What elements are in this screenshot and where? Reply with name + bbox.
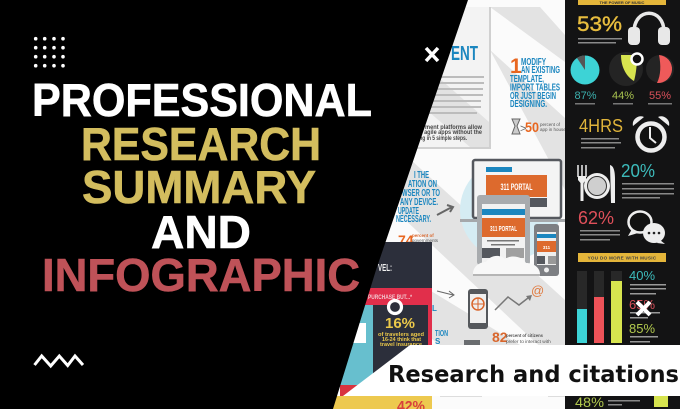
- stat: 74 percent: governments: [412, 238, 439, 243]
- bar chart: [577, 271, 622, 343]
- icon: ring: [388, 300, 402, 314]
- blue heading fragments: TION: [435, 329, 448, 338]
- arrow toward phone: [437, 291, 454, 298]
- step 1 heading: IMPORT TABLES: [510, 82, 560, 94]
- dark panel: travel infographic: travel insurance: [380, 342, 422, 348]
- pie: 55%: [646, 55, 674, 104]
- banner: you do more with music: [578, 253, 666, 262]
- heading: ENT: ENT: [451, 43, 478, 65]
- bold text block: [418, 125, 483, 142]
- stat: 50 percent: percent of: [540, 122, 561, 127]
- step 1 heading: DESIGNING.: [510, 99, 547, 110]
- stat: 65%: [629, 297, 660, 318]
- icon: plate and cutlery: [578, 165, 615, 203]
- dark panel: travel infographic: of travelers aged: [378, 332, 424, 338]
- heading: update on any device: NECESSARY.: [396, 214, 431, 225]
- stat: 50 percent: app in house: [540, 127, 566, 132]
- bottom strip: infographic remnants: [333, 394, 680, 409]
- stat: 40%: [629, 268, 666, 294]
- icon: zigzag: [34, 356, 83, 366]
- stat: 85%: 85%: [629, 321, 655, 336]
- stat: 74 percent: percent of: [412, 233, 434, 238]
- stat: 20%: [621, 161, 674, 198]
- phone: 311: [543, 245, 551, 250]
- stat: 82 percent: 82: [492, 329, 508, 345]
- cloud: [473, 256, 540, 276]
- dark panel: travel infographic: 16-24 think that: [382, 337, 421, 343]
- heading: update on any device: WSER OR TO: [402, 188, 440, 199]
- icon: devices showing 311 portal: [460, 160, 570, 276]
- dark panel: travel infographic: 16%: [385, 315, 415, 332]
- pie: 55%: 55%: [649, 90, 671, 102]
- stat: 82 percent: prefer to interact with: [506, 339, 551, 345]
- step 1 heading: AN EXISTING: [521, 65, 560, 76]
- bold text block: ment platforms allow: [425, 125, 482, 131]
- title: [32, 74, 372, 301]
- banner: you do more with music: YOU DO MORE WITH MUSIC: [588, 256, 657, 260]
- stat: 62%: [578, 208, 620, 240]
- stat: 74 percent: 74: [398, 232, 414, 248]
- stat: 50 percent: [512, 119, 566, 135]
- stat: 4HRS: 4HRS: [579, 116, 623, 136]
- bold text block: , agile apps without the: [421, 130, 483, 136]
- arrow toward devices: [437, 205, 453, 215]
- heading: update on any device: ATION ON: [408, 179, 437, 190]
- blue heading fragments: L: [432, 304, 437, 313]
- body text lines: [427, 76, 484, 114]
- stat: 40%: 40%: [629, 268, 655, 283]
- heading: update on any device: ANY DEVICE.: [400, 197, 438, 208]
- stat: 53%: 53%: [577, 13, 622, 36]
- stat: 65%: 65%: [629, 297, 655, 312]
- icon: cross near panel edge: [426, 48, 438, 61]
- black diagonal panel: [0, 0, 468, 409]
- blue heading fragments: S: [435, 337, 441, 346]
- heading: update on any device: UPDATE: [398, 206, 419, 217]
- title: SUMMARY: [82, 161, 316, 213]
- title: AND: [151, 206, 251, 258]
- pie: 44%: 44%: [612, 90, 634, 102]
- title: RESEARCH: [81, 118, 321, 170]
- bold text block: ing in 5 simple steps.: [418, 136, 467, 142]
- stat: 50 percent: 50: [525, 119, 539, 135]
- heading: update on any device: [396, 170, 440, 225]
- icon: dot grid: [34, 37, 65, 68]
- title: INFOGRAPHIC: [42, 249, 360, 301]
- dark panel: travel infographic: VEL:: [378, 263, 392, 274]
- step 1 heading: 1: [510, 55, 522, 78]
- step 1 heading: MODIFY: [521, 57, 546, 68]
- icon: speech bubbles: [628, 212, 665, 244]
- stat: 74 percent: [398, 232, 439, 248]
- infographic collage: light portal panel: [380, 0, 570, 409]
- dark panel: travel infographic: [340, 242, 432, 396]
- right panel: music infographic: [565, 0, 680, 345]
- stat: 50 percent: >: [520, 123, 526, 135]
- stat: 82 percent: percent of citizens: [506, 333, 543, 339]
- icon: alarm clock: [633, 116, 669, 150]
- step 1 heading: TEMPLATE,: [510, 74, 544, 85]
- line trend with at sign: @: [531, 283, 544, 298]
- title: PROFESSIONAL: [32, 74, 372, 126]
- pie: 44%: [609, 52, 643, 104]
- tablet: 311 PORTAL: [490, 226, 517, 233]
- step 1 heading: [510, 55, 560, 110]
- step 1 heading: OR JUST BEGIN: [510, 91, 556, 102]
- pie: 87%: 87%: [574, 90, 597, 102]
- pie: 87%: [570, 56, 600, 104]
- icon: headphones: [628, 13, 670, 45]
- laptop: 311 PORTAL: [500, 182, 533, 192]
- blue heading fragments: [432, 304, 448, 346]
- banner: research and citations: [343, 345, 680, 396]
- dark panel: travel infographic: PURCHASE BUT...*: [368, 294, 412, 301]
- stat: 20%: 20%: [621, 161, 655, 181]
- header band: the power of music: [578, 0, 666, 5]
- line trend with at sign: [495, 283, 544, 310]
- stat: 85%: [629, 321, 658, 342]
- stat: 62%: 62%: [578, 208, 614, 228]
- icon: smartphone with globe: [464, 289, 488, 345]
- header band: the power of music: THE POWER OF MUSIC: [600, 0, 645, 5]
- stat: 82 percent: [492, 329, 551, 345]
- icon: cross on bar chart: [637, 302, 650, 315]
- heading: update on any device: I THE: [414, 170, 429, 181]
- stat: 4HRS: [579, 116, 623, 148]
